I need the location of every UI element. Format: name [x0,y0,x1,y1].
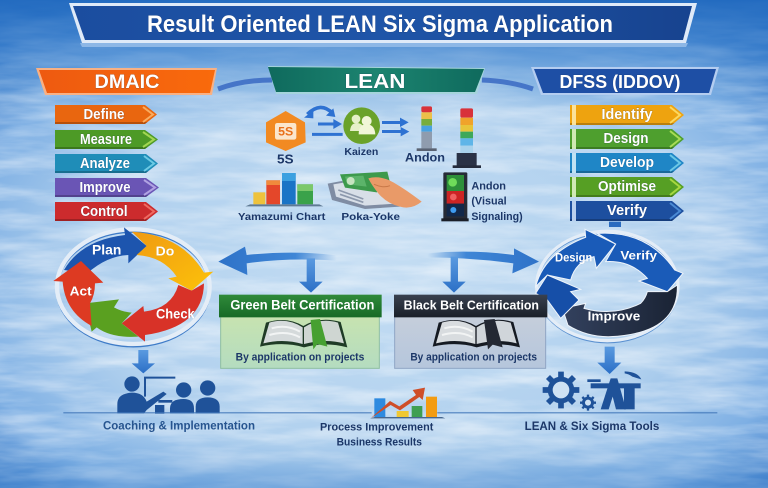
segment: Design: Design [555,250,592,264]
label: Poka-Yoke: Poka-Yoke [341,212,400,223]
heading: DMAIC [36,68,217,95]
label: Andon (Visual Signaling): Signaling) [471,211,523,223]
step: Optimise: Optimise [598,179,656,195]
icon: tall Andon stack light [453,108,481,168]
step: Control: Control [80,204,128,220]
step: Develop: Develop [600,155,654,171]
step: Verify: Verify [607,203,647,219]
icon: growth chart with arrow [370,388,445,418]
segment: Act: Act [70,283,92,298]
panel: Black Belt Certification: By application on projects [410,352,537,364]
step: Analyze: Analyze [80,156,130,172]
IDDOV cycle diagram [394,222,717,433]
label: LEAN & Six Sigma Tools: LEAN & Six Sigma Tools [525,420,659,433]
panel: Green Belt Certification: Green Belt Certification [230,298,374,313]
segment: Check: Check [156,306,195,321]
segment: Do [132,232,213,291]
step: Design: Design [604,131,648,147]
segment: Check [122,283,204,342]
connector arc: DMAIC to LEAN [218,80,272,89]
segment: Verify [597,233,683,292]
label: Andon (Visual Signaling): Andon [471,180,506,192]
label: Andon: Andon [405,151,445,165]
panel: Black Belt Certification [394,295,547,368]
segment: Plan: Plan [92,242,121,258]
arrow: left part of double arrow to IDDOV [427,248,539,273]
icon: 5S hexagon [266,111,306,151]
label: Kaizen: Kaizen [344,147,378,158]
heading: DMAIC: DMAIC [94,71,160,93]
segment: Verify: Verify [620,248,657,262]
ring base [57,229,210,346]
arrows: Kaizen to Andon [382,118,409,136]
IDDOV step list [570,105,684,221]
heading: LEAN [268,66,485,94]
step: Identify: Identify [602,107,652,123]
icon: coaching group [117,376,220,414]
icon: small Andon stack light [417,106,437,151]
heading: DFSS (IDDOV): DFSS (IDDOV) [560,71,680,92]
title banner [69,3,697,47]
icon: 5S hexagon: 5S [278,125,293,139]
LEAN tools cluster [238,106,523,223]
icon: gears and tools [543,371,641,411]
panel: Black Belt Certification: Black Belt Certification [404,298,539,313]
arrows: 5S to Kaizen [304,107,343,134]
baseline rule left [63,411,372,414]
panel: Green Belt Certification [219,295,382,368]
baseline rule right [437,411,717,414]
segment: Plan [64,227,147,273]
heading: LEAN: LEAN [344,71,406,93]
arrow: left curved arrow to PDCA [218,247,337,275]
label: 5S: 5S [277,152,294,166]
DMAIC step list [55,105,159,221]
step: Define: Define [84,107,124,123]
label: Yamazumi Chart: Yamazumi Chart [238,212,326,223]
step: Improve: Improve [80,180,130,196]
connector arc: LEAN to DFSS [482,80,533,89]
label: Process Improvement Business Results [320,422,434,448]
arrow: down to Green Belt [299,258,323,293]
icon: open book with dark ribbon [433,319,520,349]
label: Andon (Visual Signaling): (Visual [471,196,507,208]
segment: lower-left arrow [536,275,581,318]
title banner: Result Oriented LEAN Six Sigma Application [147,11,613,38]
segment: Act [53,261,103,326]
arrow: down to Black Belt [442,257,466,293]
arrow: IDDOV down to tools [597,347,621,374]
panel: Green Belt Certification: By application on projects [236,352,364,364]
segment: Improve: Improve [588,309,640,324]
PDCA cycle diagram [53,227,382,432]
icon: Andon visual signaling light [441,172,469,221]
segment: green arrow [85,299,138,337]
label: Coaching & Implementation: Coaching & Implementation [103,418,255,432]
segment: Design [536,229,616,287]
label: Process Improvement Business Results: Business Results [337,436,422,448]
icon: Kaizen team circle [343,107,380,144]
arrow: PDCA down to coaching [132,350,155,373]
step: Measure: Measure [80,132,132,148]
ring base [537,222,678,342]
heading: DFSS (IDDOV) [531,67,719,95]
label: Process Improvement Business Results: Process Improvement [320,422,434,434]
segment: Do: Do [156,244,174,259]
process improvement results [320,388,445,448]
label: Andon (Visual Signaling) [471,180,523,223]
icon: Poka-Yoke book and hand [328,172,422,209]
segment: Improve [562,285,677,337]
icon: open book with green ribbon [260,319,347,349]
icon: Yamazumi stacked bars [245,173,323,206]
